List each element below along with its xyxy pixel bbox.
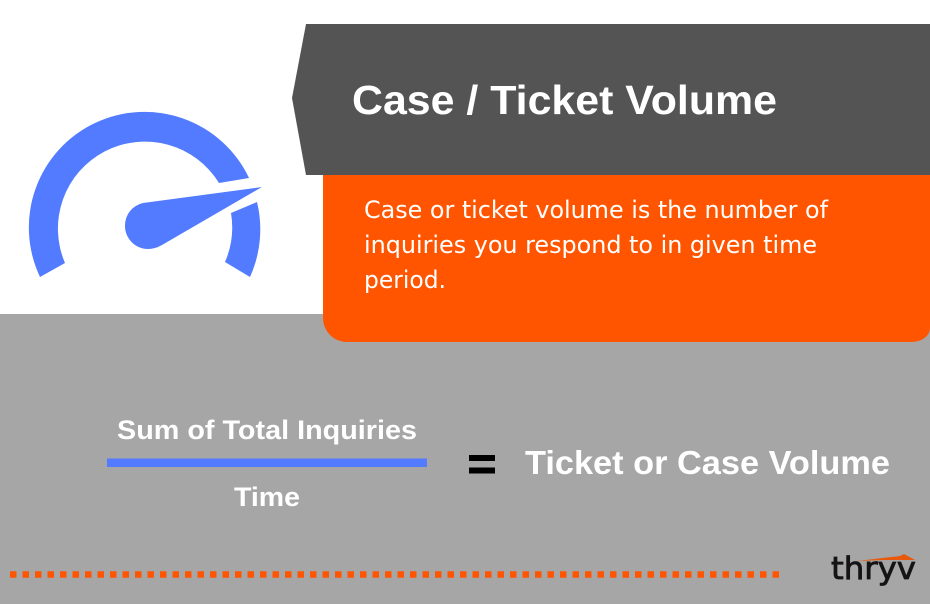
formula [107, 415, 890, 512]
denominator: Time [234, 482, 300, 512]
dotted divider [10, 571, 780, 578]
heading banner [292, 24, 930, 175]
logo: thryv: thryv [831, 551, 916, 587]
logo arrow [857, 554, 915, 561]
description text: period. [364, 266, 446, 294]
numerator: Sum of Total Inquiries [117, 415, 417, 445]
fraction bar [107, 458, 427, 467]
description text: Case or ticket volume is the number of [364, 196, 829, 224]
result: Ticket or Case Volume [525, 444, 890, 481]
equals sign [469, 455, 495, 474]
panel: orange description [323, 170, 930, 342]
title: Case / Ticket Volume [352, 77, 777, 123]
description text [364, 196, 829, 294]
grey lower panel [0, 314, 930, 604]
icon: speedometer gauge [29, 112, 262, 277]
description text: inquiries you respond to in given time [364, 231, 817, 259]
